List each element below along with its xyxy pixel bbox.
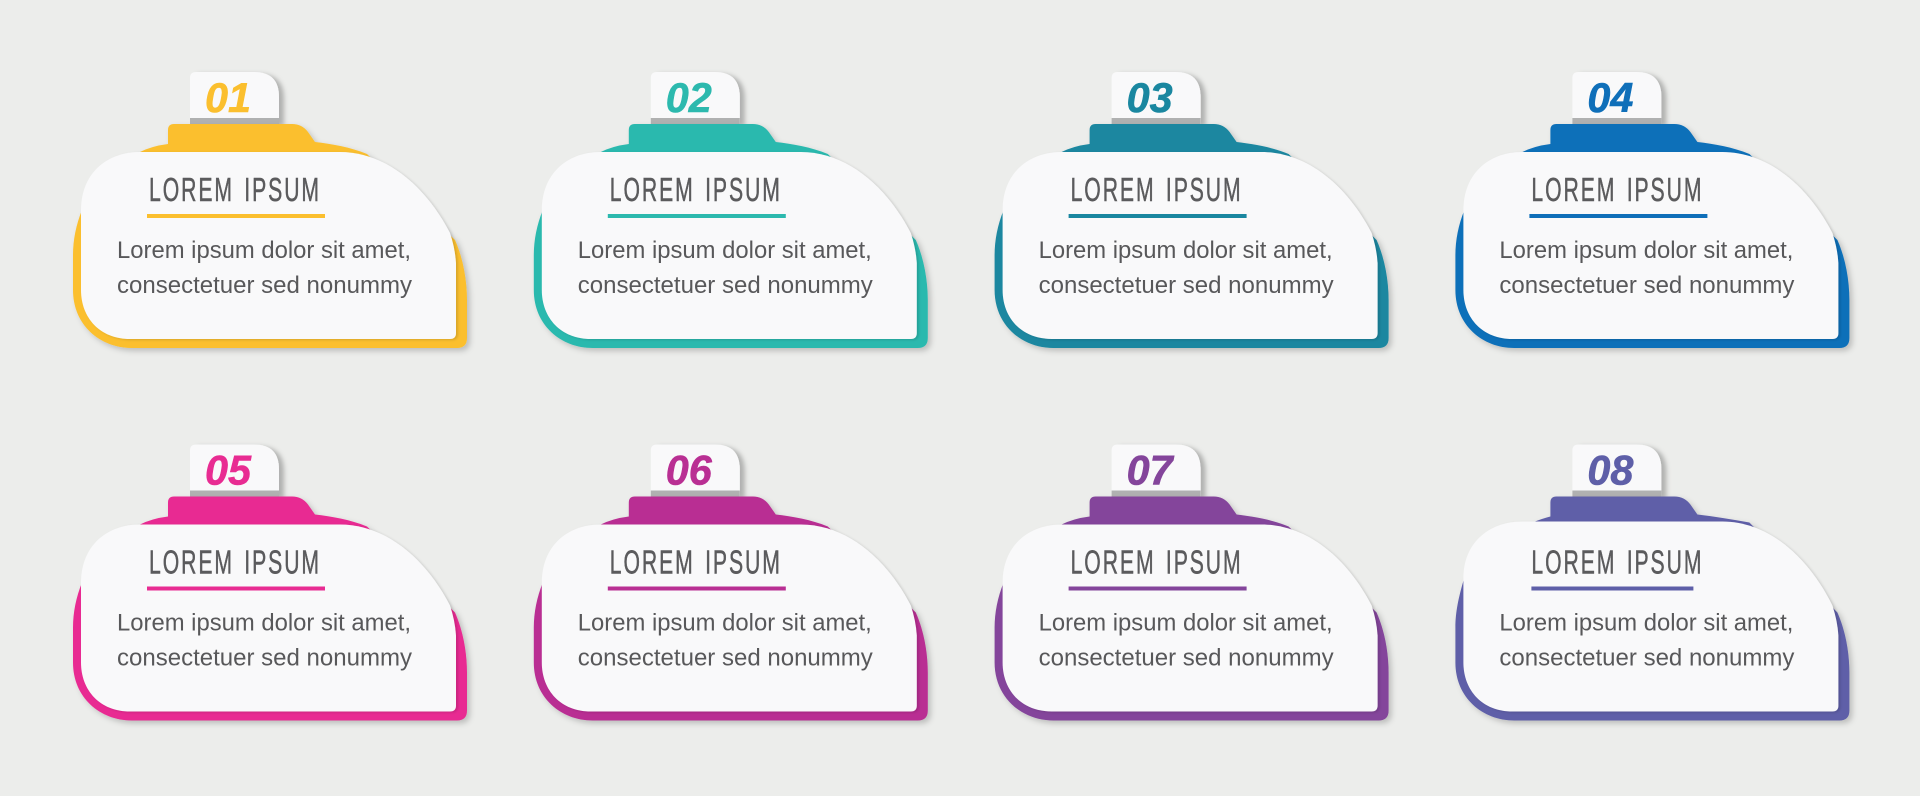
coloured backing shape [1455,124,1849,348]
number tab [1572,72,1661,124]
number tab [1572,444,1661,496]
number: 06 [666,446,712,494]
coloured backing shape [995,124,1389,348]
heading: LOREM IPSUM [149,544,321,580]
number tab [190,444,279,496]
body text: consectetuer sed nonummy [1039,644,1334,672]
card 05 [73,444,467,720]
heading underline [608,586,786,590]
body text: consectetuer sed nonummy [1039,272,1334,299]
card 04 [1455,72,1849,348]
coloured backing shape [534,124,928,348]
number: 02 [666,74,712,121]
heading underline [1069,586,1247,590]
card 03 [995,72,1389,348]
body text [1039,237,1334,299]
body text [578,610,873,672]
heading underline [1069,214,1247,218]
white panel [542,524,917,712]
card 07 [995,444,1389,720]
heading underline [1531,586,1693,590]
white panel [81,524,456,712]
heading: LOREM IPSUM [610,171,782,208]
body text [1499,610,1794,672]
coloured backing shape [995,496,1389,720]
body text: Lorem ipsum dolor sit amet, [1499,237,1793,264]
body text: Lorem ipsum dolor sit amet, [1499,610,1793,636]
white panel [1463,152,1838,339]
body text: Lorem ipsum dolor sit amet, [578,610,872,636]
body text: consectetuer sed nonummy [1499,272,1794,299]
body text [578,237,873,299]
body text: Lorem ipsum dolor sit amet, [1039,237,1333,264]
body text [1039,610,1334,672]
body text [117,237,412,299]
number: 07 [1127,446,1174,494]
white panel [1003,524,1378,712]
body text: Lorem ipsum dolor sit amet, [578,237,872,264]
number tab [1112,72,1201,124]
coloured backing shape [73,124,467,348]
body text: consectetuer sed nonummy [117,644,412,672]
number tab [651,72,740,124]
white panel [542,152,917,339]
heading underline [608,214,786,218]
coloured backing shape [73,496,467,720]
number: 03 [1127,74,1173,121]
coloured backing shape [534,496,928,720]
number: 04 [1587,74,1633,121]
card 02 [534,72,928,348]
card 01 [73,72,467,348]
heading: LOREM IPSUM [1071,544,1243,580]
number tab [190,72,279,124]
white panel [1463,522,1838,712]
body text: consectetuer sed nonummy [578,644,873,672]
number: 01 [205,74,251,121]
number tab [1112,444,1201,496]
card 06 [534,444,928,720]
number: 05 [205,446,252,494]
heading underline [147,586,325,590]
white panel [1003,152,1378,339]
card 08 [1455,444,1849,720]
body text: Lorem ipsum dolor sit amet, [117,610,411,636]
body text [117,610,412,672]
heading underline [1529,214,1707,218]
heading: LOREM IPSUM [149,171,321,208]
body text: Lorem ipsum dolor sit amet, [117,237,411,264]
coloured backing shape [1455,496,1849,720]
white panel [81,152,456,339]
number: 08 [1587,446,1634,494]
heading: LOREM IPSUM [1071,171,1243,208]
body text: consectetuer sed nonummy [578,272,873,299]
body text: consectetuer sed nonummy [1499,644,1794,672]
body text [1499,237,1794,299]
number tab [651,444,740,496]
heading: LOREM IPSUM [1531,544,1703,580]
body text: consectetuer sed nonummy [117,272,412,299]
body text: Lorem ipsum dolor sit amet, [1039,610,1333,636]
heading underline [147,214,325,218]
heading: LOREM IPSUM [1531,171,1703,208]
heading: LOREM IPSUM [610,544,782,580]
